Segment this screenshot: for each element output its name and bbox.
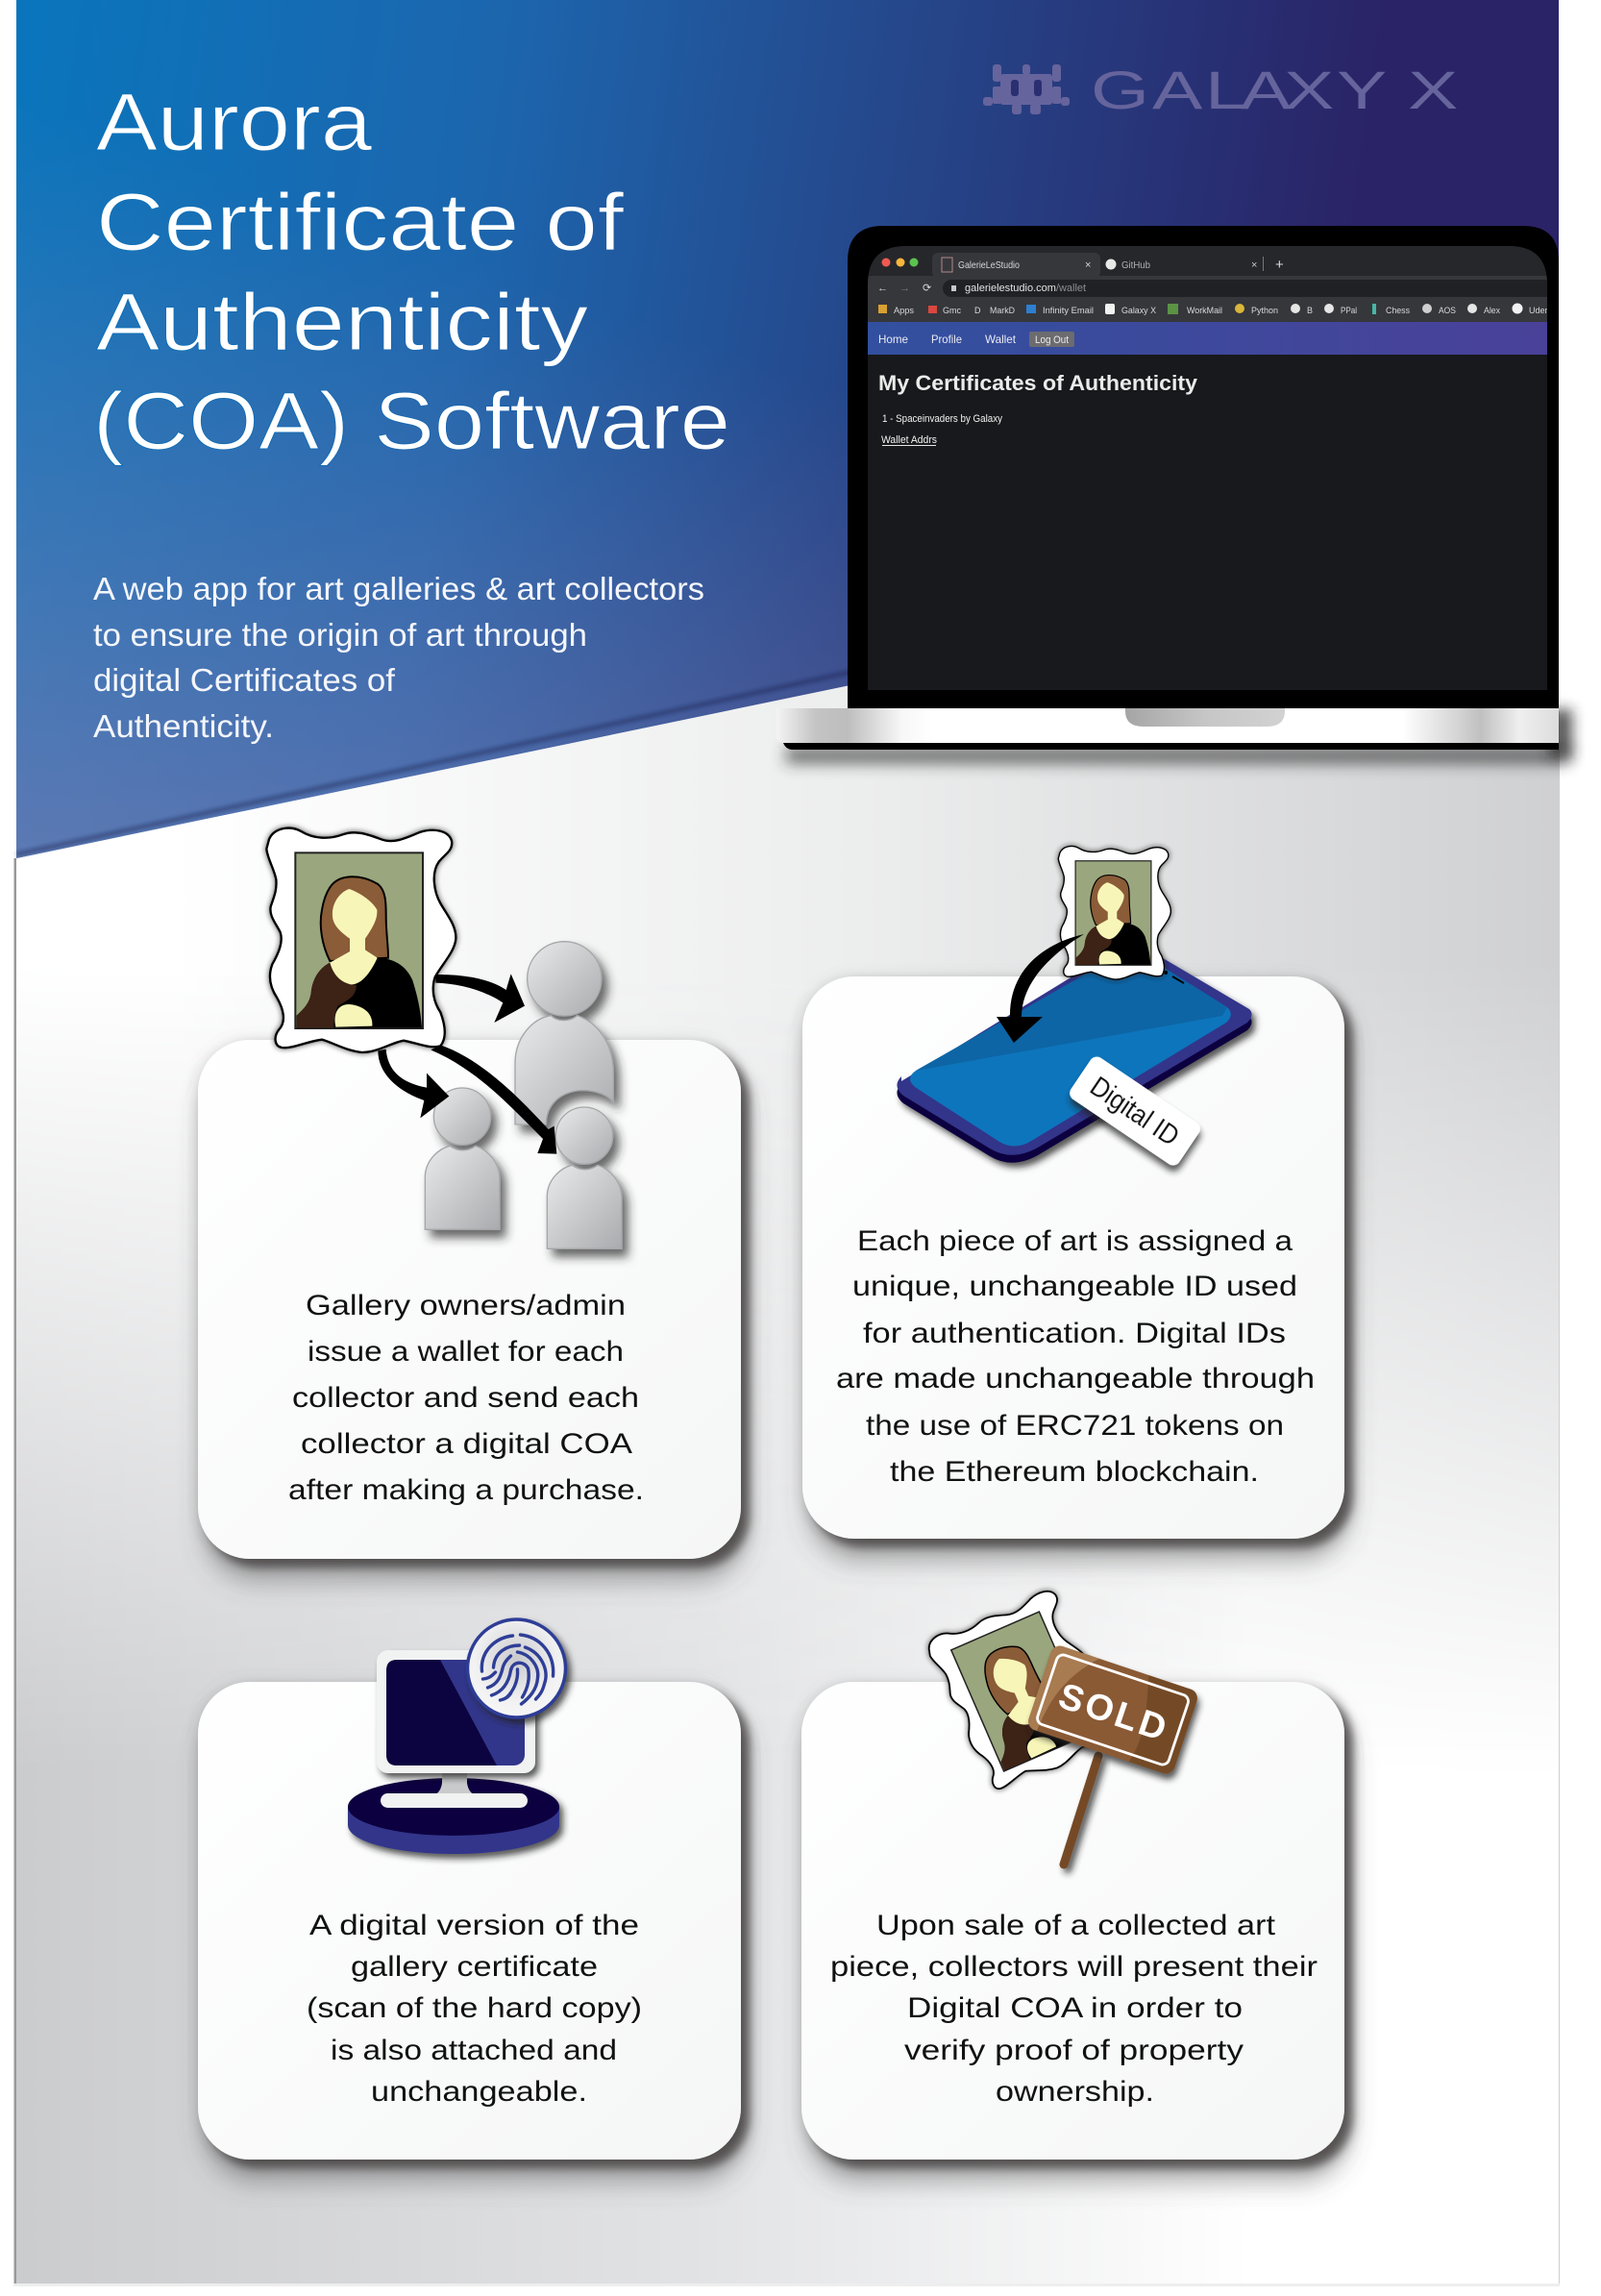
logo: Galaxy X <box>983 61 1458 120</box>
card 4 text: Digital COA in order to <box>907 1992 1243 2024</box>
card 1 text: Gallery owners/admin <box>306 1290 626 1321</box>
label: Digital ID: Digital ID <box>1084 1071 1184 1152</box>
illustration: phone with digital ID <box>897 846 1252 1169</box>
laptop base <box>776 708 1559 743</box>
laptop screen: Udem <box>1529 306 1552 315</box>
icon: sign post <box>1064 1756 1098 1864</box>
laptop screen: Wallet Addrs <box>881 434 937 446</box>
panel: card 3 background <box>198 1682 741 2160</box>
icon: small person left <box>425 1088 500 1229</box>
illustration: computer with fingerprint <box>348 1619 565 1854</box>
card 2 text: are made unchangeable through <box>836 1363 1315 1395</box>
laptop screen: Profile <box>931 333 962 346</box>
card 2 text <box>836 1225 1315 1488</box>
phone camera <box>1165 971 1184 983</box>
card 4 text: verify proof of property <box>904 2035 1244 2066</box>
illustration: sold painting <box>924 1585 1199 1864</box>
page background <box>13 654 1560 2286</box>
laptop screen: Wallet <box>985 333 1017 346</box>
laptop screen: Python <box>1251 306 1278 315</box>
laptop screen: D <box>974 306 981 315</box>
subtitle: digital Certificates of <box>93 662 396 698</box>
card 4 text: ownership. <box>996 2076 1154 2108</box>
laptop screen: My Certificates of Authenticity <box>878 371 1198 395</box>
laptop screen: Alex <box>1484 306 1500 315</box>
card 3 text <box>307 1910 642 2108</box>
laptop screen: /wallet <box>1056 283 1086 294</box>
header gradient band <box>16 0 1559 858</box>
card 4 text: Upon sale of a collected art <box>876 1910 1276 1941</box>
card 1 text: collector a digital COA <box>301 1428 632 1460</box>
panel: card 4 background <box>801 1682 1344 2160</box>
card 3 text: unchangeable. <box>371 2076 587 2108</box>
card 3 text: gallery certificate <box>351 1951 598 1983</box>
icon: SOLD sign <box>1026 1643 1199 1776</box>
arrow into phone <box>997 934 1084 1043</box>
icon: monitor <box>377 1650 535 1808</box>
arrow to left person <box>378 1049 449 1118</box>
laptop screen: AOS <box>1439 306 1456 315</box>
card 2 text: Each piece of art is assigned a <box>857 1225 1293 1257</box>
laptop screen: Chess <box>1386 306 1410 315</box>
laptop <box>776 226 1572 763</box>
laptop screen: GitHub <box>1121 259 1150 271</box>
card 1 text: collector and send each <box>292 1382 639 1414</box>
laptop screen: PPal <box>1341 306 1357 315</box>
icon: space invader <box>983 64 1070 114</box>
icon: base disc <box>348 1778 559 1854</box>
arrow to large person <box>435 974 525 1023</box>
title: Certificate of <box>96 177 625 267</box>
card 4 text <box>830 1910 1318 2108</box>
subtitle: to ensure the origin of art through <box>93 617 587 653</box>
laptop screen: Log Out <box>1035 334 1069 346</box>
laptop screen: Infinity Email <box>1043 306 1094 315</box>
card 1 text: after making a purchase. <box>288 1474 644 1506</box>
title: Authenticity <box>96 277 588 367</box>
laptop screen: × <box>1251 259 1257 271</box>
title <box>93 77 730 466</box>
laptop screen: + <box>1275 257 1284 273</box>
icon: large person <box>515 942 613 1124</box>
card 4 text: piece, collectors will present their <box>830 1951 1318 1983</box>
card 1 text <box>288 1290 644 1506</box>
panel: card 2 background <box>802 976 1344 1539</box>
laptop screen: B <box>1307 306 1313 315</box>
card 2 text: for authentication. Digital IDs <box>863 1318 1286 1349</box>
logo wordmark: GALAXY X <box>1091 61 1458 120</box>
icon: SOLD sign: SOLD <box>1053 1676 1171 1749</box>
card 3 text: A digital version of the <box>309 1910 639 1941</box>
laptop screen <box>868 246 1558 690</box>
laptop screen: Gmc <box>943 306 961 315</box>
card 2 text: unique, unchangeable ID used <box>852 1271 1297 1302</box>
card 3 text: is also attached and <box>331 2035 617 2066</box>
card 2 text: the use of ERC721 tokens on <box>866 1410 1284 1442</box>
laptop screen: GalerieLeStudio <box>958 259 1020 271</box>
laptop screen: Apps <box>894 306 915 315</box>
title: Aurora <box>96 77 372 167</box>
subtitle: Authenticity. <box>93 708 274 744</box>
icon: small person right <box>547 1107 622 1248</box>
icon: phone <box>897 940 1252 1163</box>
label: Digital ID <box>1067 1053 1203 1169</box>
laptop screen: → <box>899 283 910 294</box>
title: (COA) Software <box>93 376 730 466</box>
icon: fingerprint badge <box>467 1619 565 1717</box>
card 2 text: the Ethereum blockchain. <box>890 1456 1259 1488</box>
laptop screen: WorkMail <box>1187 306 1222 315</box>
icon: framed painting <box>1058 846 1170 979</box>
laptop screen: ⟳ <box>923 283 931 294</box>
panel: card 1 background <box>198 1040 741 1559</box>
icon: tilted framed painting <box>924 1585 1121 1796</box>
card 3 text: (scan of the hard copy) <box>307 1992 642 2024</box>
subtitle <box>93 571 704 744</box>
laptop screen: Home <box>878 333 908 346</box>
arrow to right person <box>431 1045 556 1154</box>
laptop screen: × <box>1085 259 1091 271</box>
illustration: painting sent to three collectors <box>266 828 622 1248</box>
laptop screen: galerielestudio.com <box>965 283 1056 294</box>
laptop screen: Galaxy X <box>1121 306 1156 315</box>
laptop screen: 1 - Spaceinvaders by Galaxy <box>882 413 1002 425</box>
card 1 text: issue a wallet for each <box>308 1336 624 1368</box>
subtitle: A web app for art galleries & art collectors <box>93 571 704 606</box>
laptop screen: MarkD <box>990 306 1015 315</box>
icon: framed painting <box>266 828 456 1052</box>
laptop screen: ← <box>877 283 888 294</box>
